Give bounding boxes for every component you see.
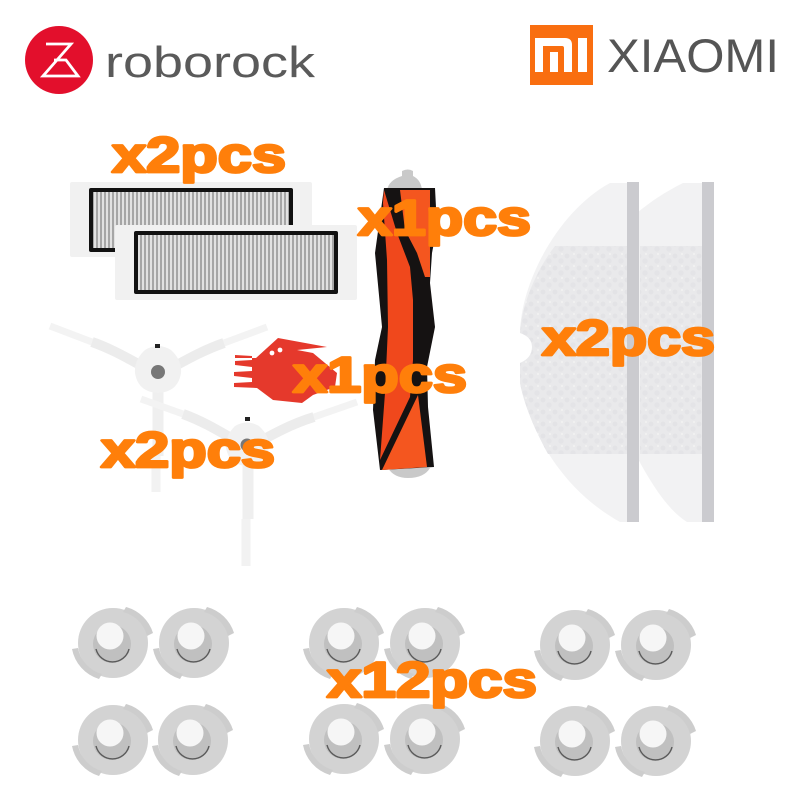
quantity label: tank filters: x12pcs bbox=[327, 652, 537, 708]
filter group centre bbox=[303, 607, 465, 775]
back filter bbox=[70, 182, 312, 257]
side brush 2 bbox=[141, 399, 357, 566]
icon: Roborock red circle bbox=[25, 26, 93, 94]
HEPA filters bbox=[70, 182, 357, 300]
orange body: upper blade bbox=[400, 190, 430, 277]
black bristles bbox=[373, 188, 437, 470]
main roller brush bbox=[373, 170, 437, 478]
quantity label: side brushes: x2pcs bbox=[101, 422, 275, 478]
water tank filters bbox=[72, 607, 696, 777]
red cleaning comb bbox=[234, 338, 337, 403]
Roborock wordmark: roborock bbox=[105, 38, 316, 87]
quantity label: comb: x1pcs bbox=[293, 347, 467, 403]
icon: MI orange square bbox=[530, 25, 593, 85]
front filter bbox=[115, 225, 357, 300]
Xiaomi wordmark: XIAOMI bbox=[607, 29, 779, 82]
logo: Xiaomi bbox=[530, 25, 779, 85]
quantity label: filters: x2pcs bbox=[112, 127, 286, 183]
side brush 1 bbox=[50, 326, 267, 492]
roller end caps bbox=[387, 170, 430, 478]
filter group left bbox=[72, 607, 234, 776]
side brushes bbox=[50, 326, 357, 566]
mop cloth 1 bbox=[520, 182, 639, 522]
quantity label: roller brush: x1pcs bbox=[358, 190, 531, 246]
logo: Roborock bbox=[25, 26, 316, 94]
orange body: central band bbox=[380, 190, 413, 460]
quantity label: mop cloths: x2pcs bbox=[542, 310, 715, 366]
mop cloth 2 bbox=[637, 182, 714, 522]
orange body: lower blade bbox=[382, 395, 427, 470]
mop cloths bbox=[520, 182, 714, 522]
filter group right bbox=[534, 609, 696, 777]
